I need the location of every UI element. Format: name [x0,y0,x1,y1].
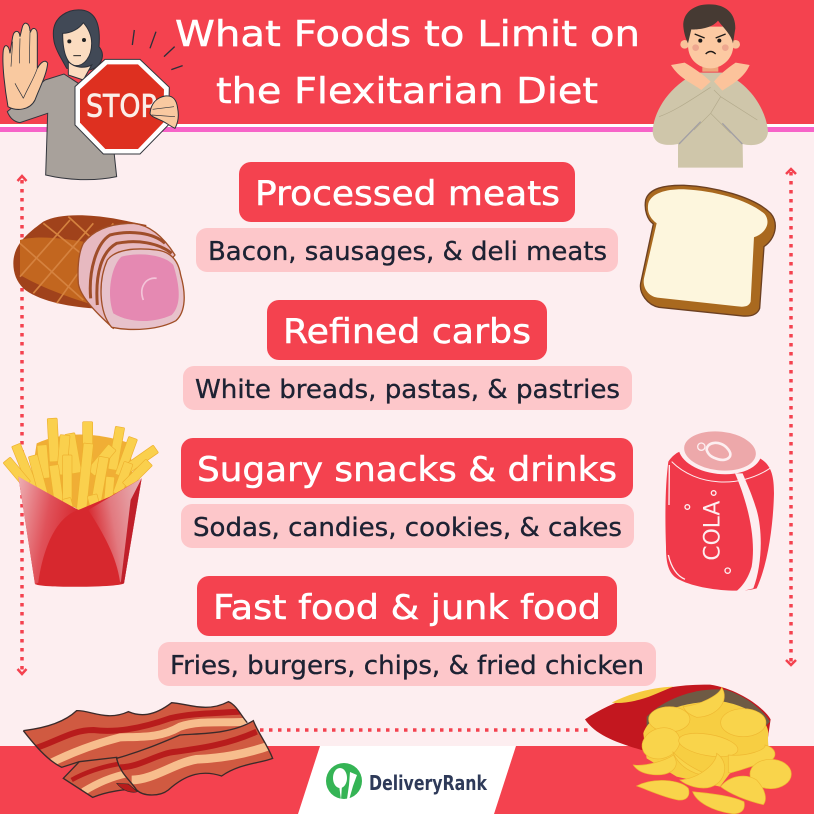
illustration: ham [13,215,184,329]
item: sugary snacks heading: Sugary snacks & drinks [197,450,617,490]
item: refined carbs examples [183,366,632,410]
item: refined carbs heading [267,300,547,360]
illustration: french fries [3,418,159,587]
illustration: cola can: COLA [700,501,725,561]
footer band [0,746,814,814]
icon: fork and spoon [326,763,362,801]
item: fast food examples: Fries, burgers, chips, & fried chicken [170,651,644,681]
title: What Foods to Limit on [175,14,640,55]
illustration: woman with stop sign [3,10,183,180]
arrow: bottom dotted [260,728,592,732]
item: processed meats heading [239,162,575,222]
title [175,14,640,112]
title: the Flexitarian Diet [216,71,598,112]
item: refined carbs heading: Refined carbs [283,312,531,352]
item: sugary snacks examples: Sodas, candies, cookies, & cakes [193,513,622,543]
item: processed meats examples [196,228,618,272]
arrow: right dotted [786,169,796,665]
item: processed meats heading: Processed meats [255,174,560,214]
item: sugary snacks examples [181,504,634,548]
illustration: bacon [20,700,277,800]
logo: DeliveryRank [326,763,488,801]
illustration: man crossing arms [653,4,768,168]
item: fast food heading [197,576,617,636]
logo: DeliveryRank: DeliveryRank [369,771,488,795]
illustration: potato chips bag [585,685,791,814]
header band [0,0,814,132]
item: refined carbs examples: White breads, pastas, & pastries [195,375,620,405]
illustration: woman with stop sign: STOP [86,89,157,125]
item: fast food heading: Fast food & junk food [213,588,601,628]
item: sugary snacks heading [181,438,633,498]
illustration: cola can [665,422,774,593]
arrow: left dotted [18,176,26,674]
item: processed meats examples: Bacon, sausages, & deli meats [208,237,607,267]
illustration: bread slice [640,185,775,316]
item: fast food examples [158,642,656,686]
